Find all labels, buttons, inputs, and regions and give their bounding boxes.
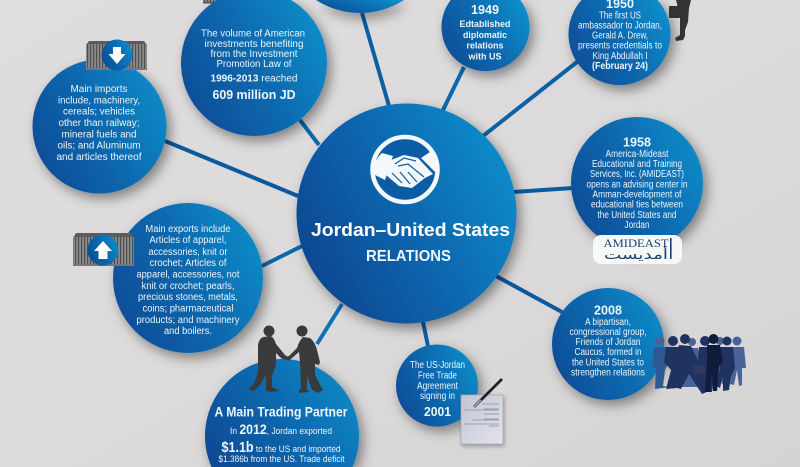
- panel: main imports: cereals; vehicles: [63, 107, 135, 118]
- panel: 1950 first ambassador: (February 24): [592, 61, 648, 72]
- panel: 1949 diplomatic relations: diplomatic: [463, 30, 507, 41]
- panel: main trading partner: A Main Trading Partner: [214, 404, 348, 420]
- panel: main trading partner: In 2012, Jordan exported: [230, 421, 332, 437]
- icon: top cropped container: [203, 0, 250, 4]
- panel: 1958 AMIDEAST: Educational and Training: [592, 159, 682, 170]
- panel: 1950 first ambassador: presents credentials to: [578, 40, 662, 52]
- panel: 2008 Friends of Jordan caucus: Friends of Jordan: [576, 337, 640, 348]
- panel: 1950 first ambassador: The first US: [599, 10, 641, 22]
- panel: 2008 Friends of Jordan caucus: strengthen relations: [571, 368, 645, 378]
- panel: 2001 free trade agreement: 2001: [424, 404, 451, 419]
- icon: handshake in ring: [372, 137, 438, 202]
- panel: 2001 free trade agreement: signing in: [420, 391, 455, 402]
- panel: 1958 AMIDEAST: Jordan: [624, 220, 650, 231]
- panel: 2001 free trade agreement: The US-Jordan: [410, 360, 465, 371]
- panel: investment volume: 609 million JD: [212, 88, 296, 102]
- panel: 1958 AMIDEAST: America-Mideast: [606, 149, 669, 160]
- icon: two businessmen shaking hands: [249, 326, 323, 393]
- panel: 2001 free trade agreement: Free Trade: [418, 370, 457, 382]
- panel: main exports: [113, 203, 263, 353]
- panel: main trading partner: $1.1b to the US and imported: [222, 440, 340, 456]
- panel: 1958 AMIDEAST: 1958: [623, 134, 651, 150]
- panel: 1958 AMIDEAST: opens an advising center in: [586, 180, 688, 190]
- panel: 1950 first ambassador: ambassador to Jordan,: [578, 20, 662, 32]
- panel: main exports: apparel, accessories, not: [136, 270, 240, 280]
- icon: AMIDEAST logo: [593, 235, 682, 264]
- panel: investment volume: Promotion Law of: [216, 59, 292, 70]
- panel: 2008 Friends of Jordan caucus: Caucus, formed in: [574, 347, 642, 358]
- panel: main imports: Main imports: [70, 84, 128, 95]
- panel: main imports: oils; and Aluminum: [58, 141, 140, 152]
- panel: main exports: accessories, knit or: [148, 247, 228, 258]
- panel: 1949 diplomatic relations: relations: [466, 40, 504, 52]
- icon: export container with up arrow: [73, 233, 134, 266]
- panel: investment volume: The volume of American: [201, 28, 305, 40]
- panel: 1949 diplomatic relations: [442, 0, 530, 71]
- panel: main exports: products; and machinery: [136, 315, 240, 326]
- icon: standing man with briefcase: [669, 0, 691, 41]
- panel: investment volume: 1996-2013 reached: [210, 74, 298, 84]
- panel: 1949 diplomatic relations: with US: [468, 52, 502, 62]
- panel: investment volume: [181, 0, 327, 136]
- panel: main imports: and articles thereof: [56, 152, 142, 163]
- panel: 1949 diplomatic relations: 1949: [471, 2, 499, 17]
- panel: main imports: include, machinery,: [58, 95, 140, 106]
- panel: 1958 AMIDEAST: the United States and: [598, 210, 676, 221]
- connector lines between hub and topic circles: [165, 13, 577, 346]
- panel: central hub Jordan–United States Relations: RELATIONS: [366, 248, 451, 265]
- panel: 1958 AMIDEAST: Services, Inc. (AMIDEAST): [590, 169, 684, 180]
- icon: crowd of people silhouettes: [652, 334, 746, 394]
- panel: 1958 AMIDEAST: Amman-development of: [592, 190, 682, 200]
- panel: 2001 free trade agreement: [396, 344, 478, 426]
- panel: 2008 Friends of Jordan caucus: [552, 288, 664, 400]
- panel: top cropped circle: [316, 0, 404, 13]
- icon: import container with down arrow: [86, 40, 147, 70]
- panel: 1950 first ambassador: Gerald A. Drew,: [592, 30, 648, 42]
- panel: 1958 AMIDEAST: [571, 117, 703, 249]
- panel: main exports: precious stones, metals,: [138, 292, 238, 303]
- panel: main exports: Main exports include: [146, 224, 231, 235]
- panel: investment volume: from the Investment: [210, 49, 298, 60]
- panel: main imports: [32, 60, 166, 194]
- icon: document and pen: [461, 379, 503, 444]
- panel: main imports: other than railway;: [58, 118, 140, 129]
- panel: main exports: coins; pharmaceutical: [142, 304, 234, 314]
- panel: 2008 Friends of Jordan caucus: the United States to: [572, 358, 644, 368]
- panel: central hub Jordan–United States Relations: [296, 104, 516, 324]
- panel: main trading partner: [205, 359, 359, 467]
- panel: 2008 Friends of Jordan caucus: 2008: [594, 302, 622, 318]
- icon: AMIDEAST logo: AMIDEAST: [604, 236, 669, 250]
- panel: main exports: knit or crochet; pearls,: [142, 281, 234, 292]
- panel: 1950 first ambassador: [569, 0, 670, 85]
- panel: 2001 free trade agreement: Agreement: [417, 381, 458, 392]
- panel: main trading partner: $1.386b from the US. Trade deficit: [218, 454, 345, 465]
- panel: investment volume: investments benefiting: [204, 39, 304, 50]
- panel: 1950 first ambassador: King Abdullah I: [592, 51, 648, 62]
- icon: AMIDEAST logo: أمديست: [604, 246, 668, 263]
- panel: main imports: mineral fuels and: [62, 129, 136, 140]
- panel: central hub Jordan–United States Relations: Jordan–United States: [311, 219, 510, 240]
- panel: main exports: crochet; Articles of: [150, 258, 227, 269]
- panel: 1949 diplomatic relations: Edtablished: [460, 19, 511, 30]
- panel: main exports: and boilers.: [164, 326, 212, 337]
- panel: 2008 Friends of Jordan caucus: congressional group,: [570, 327, 646, 338]
- panel: main exports: Articles of apparel,: [150, 235, 226, 246]
- panel: 1958 AMIDEAST: educational ties between: [591, 200, 683, 210]
- panel: 2008 Friends of Jordan caucus: A bipartisan,: [585, 317, 631, 328]
